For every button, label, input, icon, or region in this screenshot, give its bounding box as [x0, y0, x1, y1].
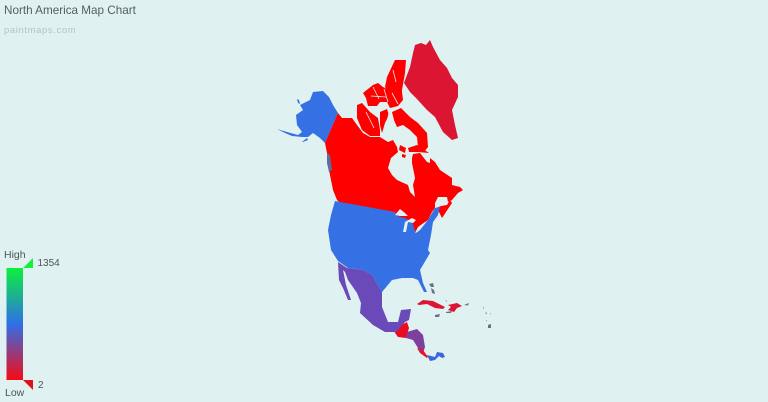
- region: Alaska: [277, 91, 338, 143]
- Ellesmere Island: [385, 60, 406, 98]
- legend high label: High: [4, 249, 26, 261]
- source label: paintmaps.com: [4, 25, 76, 36]
- Mansel Island: [402, 154, 406, 158]
- map of North America: [277, 40, 491, 361]
- region: Honduras and Nicaragua: [406, 329, 425, 353]
- legend: colour scale: [4, 249, 60, 399]
- Banks and Victoria Islands: [357, 103, 380, 136]
- region: Greenland: [404, 40, 458, 140]
- Prince of Wales Island: [380, 109, 389, 133]
- legend gradient bar: [6, 268, 23, 380]
- arctic channels: [366, 70, 398, 128]
- Ungava coast island: [408, 145, 429, 153]
- region: Vancouver coast: [327, 153, 332, 172]
- region: Canada: [325, 60, 463, 233]
- legend min marker: [23, 380, 33, 390]
- region: Cuba: [417, 300, 445, 309]
- legend min value: 2: [38, 380, 44, 391]
- region: Panama: [427, 352, 445, 361]
- legend max marker: [23, 258, 33, 268]
- Baffin Island: [392, 108, 428, 152]
- region: Guatemala and neighbours: [395, 322, 409, 338]
- Nova Scotia: [436, 200, 452, 218]
- region: Hispaniola: [448, 303, 462, 312]
- Great Lakes: [395, 209, 425, 233]
- Queen Elizabeth Islands: [363, 83, 403, 108]
- legend max value: 1354: [38, 258, 60, 269]
- region: small Caribbean islands: [429, 283, 491, 328]
- region: Mexico: [338, 262, 411, 333]
- Newfoundland: [444, 186, 451, 196]
- Canada mainland: [325, 113, 463, 233]
- legend low label: Low: [5, 387, 25, 399]
- region: United States: [328, 201, 440, 292]
- region: Costa Rica: [417, 348, 428, 358]
- Southampton Island: [399, 145, 406, 153]
- title: North America Map Chart: [4, 4, 137, 17]
